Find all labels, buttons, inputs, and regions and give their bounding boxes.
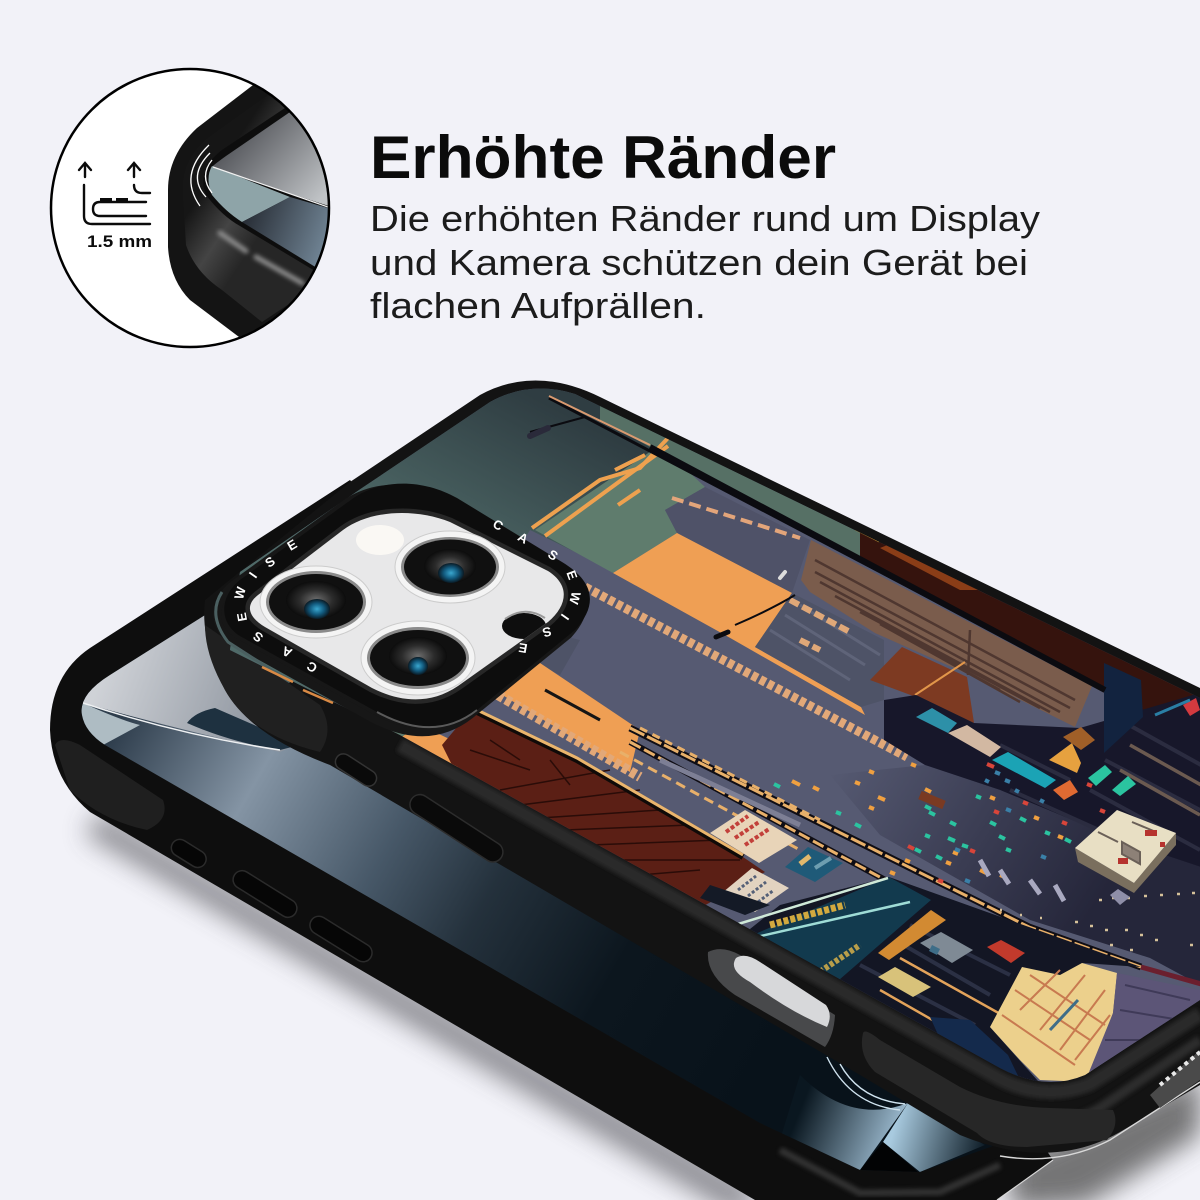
orange sunlit wall [613, 533, 865, 715]
description text: flachen Aufprällen. [370, 285, 706, 326]
grey tower [665, 487, 810, 593]
back phone display [82, 616, 992, 1172]
CASEWISE ring text: E [284, 536, 300, 554]
front phone case showing back [200, 370, 1200, 1159]
back phone corner bumper [55, 740, 165, 830]
back phone bottom rim highlight [780, 1150, 1000, 1193]
front phone mute switch [332, 751, 380, 789]
grey striped wall [755, 593, 884, 707]
peach dashed road stripe upper [585, 587, 907, 757]
CASEWISE ring text: S [545, 546, 561, 564]
street rail lines [620, 728, 1141, 967]
upper maroon roof [860, 532, 1200, 710]
description text [370, 198, 1040, 326]
description text: Die erhöhten Ränder rund um Display [370, 198, 1040, 239]
dark shop block [884, 690, 1200, 870]
back phone corner edge highlight [997, 1160, 1053, 1200]
bottom port grille [1150, 1050, 1200, 1108]
CASEWISE ring text: S [250, 628, 266, 646]
phone case artwork: pixel art street [200, 370, 1200, 1100]
cream billboard [1075, 810, 1176, 905]
lens bottom [361, 621, 475, 695]
dark blue banner [1104, 663, 1143, 753]
CASEWISE ring text: A [279, 643, 294, 661]
camera-side bumper [205, 625, 328, 752]
CASEWISE ring text: W [231, 584, 249, 601]
teal gap sliver [216, 592, 290, 682]
label: 1.5 mm: 1.5 mm [87, 232, 152, 251]
confetti lights [774, 764, 1195, 950]
CASEWISE ring text: S [262, 553, 278, 571]
lens left [260, 566, 372, 638]
brown siding building [801, 540, 1092, 727]
bottom white rim [1000, 1082, 1200, 1159]
case body [204, 380, 1200, 1153]
camera outer lip [217, 489, 583, 732]
flash [356, 525, 404, 555]
CASEWISE ring text: S [541, 624, 553, 640]
lamp posts [530, 396, 1105, 690]
left grey stripe patch [540, 638, 580, 675]
CASEWISE ring text: I [246, 569, 260, 581]
storefront signs [700, 810, 843, 915]
lower orange wall [494, 663, 640, 772]
phone shadows [85, 812, 1200, 1200]
dark blue awning figure [930, 1017, 1020, 1080]
icon: raised edge diagram [79, 163, 150, 224]
title: Erhöhte Ränder [370, 124, 836, 191]
shop signs upper [916, 698, 1200, 800]
shock-absorbing arcs [191, 145, 212, 206]
CASEWISE ring text: W [566, 590, 584, 607]
camera bump [216, 484, 590, 732]
case side highlight [400, 745, 1200, 1092]
green haze [535, 445, 705, 573]
shop frames [878, 910, 1025, 1022]
CASEWISE ring text [231, 516, 584, 676]
dark asphalt [830, 765, 1200, 985]
phone corner close-up [168, 82, 340, 340]
CASEWISE ring text: C [490, 516, 506, 534]
cream brick pavement [990, 963, 1117, 1082]
teal awning [735, 877, 931, 980]
small orange block [402, 734, 458, 768]
sensor [502, 612, 546, 639]
circular detail callout: raised edge [51, 69, 340, 347]
orange skyline strips [530, 438, 670, 538]
CASEWISE ring text: C [304, 658, 320, 676]
bottom corner bumper [862, 1032, 1115, 1147]
sky [230, 388, 650, 707]
front phone side button [406, 791, 507, 866]
charging port [708, 949, 835, 1047]
CASEWISE ring text: E [234, 611, 250, 623]
CASEWISE ring text: I [558, 611, 572, 623]
camera black ring [224, 484, 590, 727]
storefront dark band [740, 877, 1141, 1090]
back phone in black case [50, 480, 1060, 1200]
maroon building [442, 708, 765, 908]
purple pavement [1085, 967, 1200, 1082]
wallpaper glow lower corner [790, 1086, 908, 1170]
description text: und Kamera schützen dein Gerät bei [370, 242, 1028, 283]
orange art slivers [262, 667, 333, 703]
CASEWISE ring text: A [515, 529, 531, 547]
CASEWISE ring text: E [563, 568, 581, 582]
ring lower highlight [377, 710, 477, 727]
lens top right [395, 531, 505, 603]
brown chunk [870, 647, 974, 723]
back phone volume and action buttons [168, 836, 375, 965]
ring bevel and camera plateau [250, 513, 564, 699]
CASEWISE ring text: E [517, 640, 529, 656]
